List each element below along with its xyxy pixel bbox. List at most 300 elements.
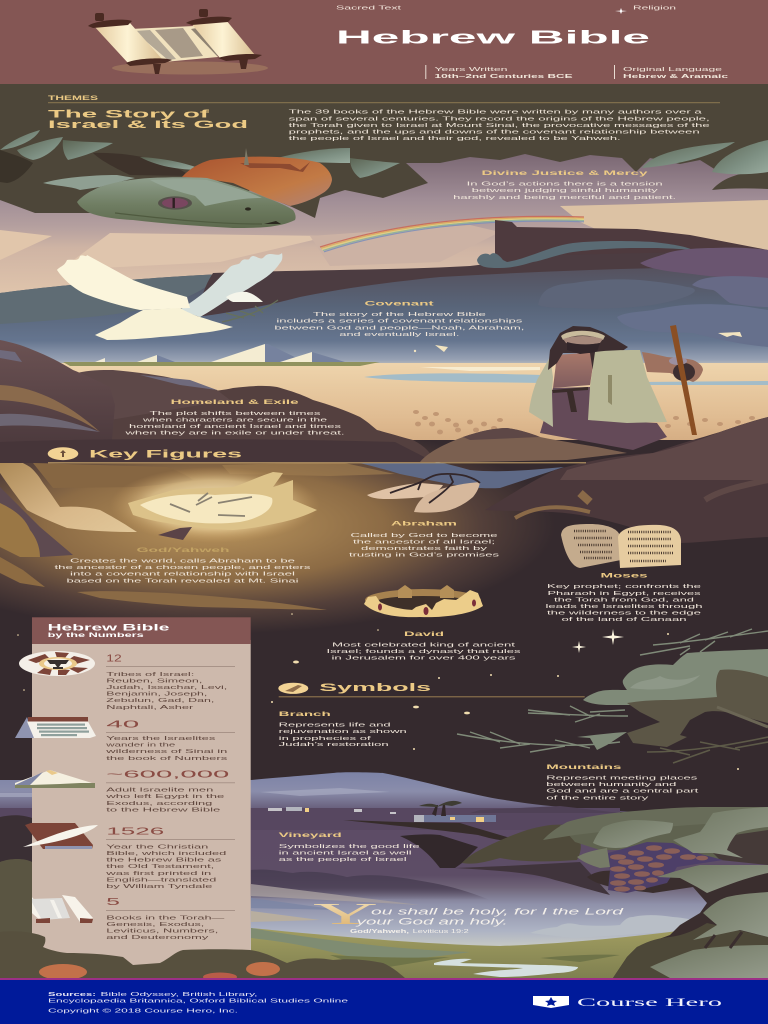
facts: Years Written — [434, 67, 508, 73]
stat: 12 tribes: Benjamin, Joseph, — [106, 692, 208, 698]
bush glow — [110, 467, 320, 543]
dark hollow under bush — [455, 862, 610, 895]
snake nostrils — [245, 207, 281, 224]
heading: Symbols — [278, 682, 585, 697]
category labels: Sacred Text — [336, 6, 402, 12]
quote text: ou shall be holy, for I the Lord — [371, 907, 625, 917]
cloak fold — [608, 375, 612, 405]
text: Mountains — [546, 764, 699, 801]
icon: torah scroll — [88, 9, 268, 74]
text: Mountains: Represent meeting places — [546, 776, 697, 782]
stat: 600,000 — [104, 770, 235, 813]
text: Covenant: between God and people—Noah, Abraham, — [274, 325, 525, 331]
icon: burning bush — [110, 467, 320, 543]
stat: 600,000: Exodus, according — [106, 801, 212, 807]
panel body — [32, 640, 251, 970]
base band of rocks — [0, 439, 436, 463]
text: Covenant — [274, 300, 525, 338]
sky — [0, 140, 768, 300]
icon: mountain — [15, 770, 95, 788]
pale clouds — [530, 915, 700, 938]
first rock hump — [0, 340, 115, 463]
footer — [0, 978, 768, 1024]
text: God/Yahweh — [54, 547, 311, 584]
branch — [717, 707, 768, 727]
sources: Sources: — [48, 992, 96, 998]
water pools — [364, 367, 768, 385]
stat: 12 tribes: Zebulun, Gad, Dan, — [106, 698, 215, 704]
bush trunk — [158, 527, 192, 540]
text: Vineyard: Symbolizes the good life — [279, 844, 421, 850]
stat: 1526: Year the Christian — [106, 844, 208, 850]
text: Abraham: Abraham — [391, 520, 457, 528]
stat: 12 tribes: 12 — [106, 654, 122, 665]
text: Abraham — [349, 520, 499, 559]
tail — [95, 308, 233, 340]
pale leaf on branch — [577, 732, 627, 750]
stat: 40 years: 40 — [106, 719, 141, 730]
cave glow — [0, 440, 768, 640]
heading: Israel & Its God — [48, 119, 248, 131]
yellow-green valley — [251, 928, 700, 978]
intro paragraph: the people of Israel and their god, revealed to be Yahweh. — [289, 136, 621, 142]
logo — [533, 996, 723, 1009]
apple top highlights — [240, 162, 310, 172]
intro paragraph: The 39 books of the Hebrew Bible were written by many authors over a — [289, 110, 703, 116]
text: Homeland & Exile: homeland of ancient Israel and times — [129, 424, 341, 430]
text: Moses: the wilderness to the edge — [547, 610, 703, 616]
crown jewels — [378, 600, 476, 615]
dusk sky — [0, 825, 768, 978]
scroll shadow — [112, 62, 268, 74]
stat: 12 tribes: Judah, Issachar, Levi, — [106, 685, 228, 691]
text: David: David — [404, 631, 444, 638]
text: Vineyard: in ancient Israel as well — [279, 850, 412, 856]
text: Vineyard: Vineyard — [279, 832, 342, 839]
snake head — [77, 177, 296, 228]
stat: 5 books: Genesis, Exodus, — [106, 922, 205, 928]
blue stream — [312, 450, 564, 488]
night ground — [0, 440, 768, 785]
bottom gold streak — [77, 591, 327, 610]
text: Divine Justice & Mercy — [453, 170, 677, 201]
left rock mass — [0, 340, 436, 463]
sky below hill — [0, 250, 768, 366]
stat: 600,000: who left Egypt in the — [104, 794, 226, 800]
heading: The Story of — [48, 108, 210, 120]
vine leaves top band — [543, 807, 768, 840]
intro paragraph: prophets, and the ups and downs of the covenant relationship between — [289, 130, 700, 136]
header band — [0, 0, 768, 84]
right roller — [190, 20, 255, 58]
olive sprig — [222, 300, 278, 322]
category labels — [336, 6, 676, 12]
text: Homeland & Exile — [123, 399, 345, 437]
leaf C — [657, 865, 768, 893]
beard — [567, 342, 600, 354]
rock ledge arcs — [515, 480, 768, 518]
text: Covenant: includes a series of covenant relationships — [276, 319, 522, 325]
header background — [0, 0, 768, 84]
small stars — [17, 613, 739, 770]
vine and grapes — [543, 807, 768, 978]
sources: Encyclopaedia Britannica, Oxford Biblical Studies Online — [48, 999, 348, 1005]
dark coil — [93, 153, 190, 176]
text: Branch: Represents life and — [279, 722, 391, 728]
lower olive bush — [613, 923, 768, 978]
text: Covenant: and eventually Israel. — [339, 332, 460, 338]
text: God/Yahweh: the ancestor of a chosen people, and enters — [54, 565, 311, 571]
icon: sandals — [367, 474, 480, 513]
stat: 1526: the Hebrew Bible as — [106, 858, 221, 864]
stat: 5 books: Leviticus, Numbers, — [106, 929, 219, 935]
text: Mountains: of the entire story — [546, 795, 648, 801]
crown back ring — [365, 589, 481, 611]
sources: Bible Odyssey, British Library, — [100, 992, 258, 998]
palm trees — [419, 801, 462, 816]
snake neck scales — [43, 175, 135, 190]
title: Hebrew Bible — [336, 26, 650, 48]
leaf E — [650, 945, 768, 978]
text: Mountains: between humanity and — [546, 782, 676, 788]
horizon strip — [63, 362, 380, 366]
text: Abraham: Called by God to become — [350, 533, 499, 539]
text: Branch — [279, 711, 407, 748]
bush leaves — [170, 493, 252, 516]
stat: 40 years: Years the Israelites — [106, 736, 215, 742]
heading: Key Figures: Key Figures — [89, 448, 242, 460]
face — [563, 336, 603, 346]
stat: 5 books: 5 — [106, 897, 121, 908]
stat: 600,000: ~600,000 — [106, 770, 231, 781]
headband — [561, 331, 605, 340]
lower right sprig — [647, 737, 768, 763]
text: Vineyard: as the people of Israel — [279, 857, 407, 863]
text: Branch: rejuvenation as shown — [279, 729, 407, 735]
quote attribution — [350, 929, 469, 935]
stat: 1526: the Old Testament, — [106, 864, 215, 870]
dove head — [226, 292, 263, 302]
right wing — [180, 253, 282, 317]
panel title — [48, 623, 169, 639]
text: Branch: Judah’s restoration — [279, 742, 389, 748]
left tablet — [561, 524, 621, 568]
text: Abraham: demonstrates faith by — [361, 546, 487, 552]
text: Branch: in prophecies of — [279, 736, 371, 742]
bottom olive bushes — [0, 931, 405, 978]
figure: Moses — [529, 325, 703, 450]
left gold lump upper — [0, 503, 40, 557]
stat: 5 books: Books in the Torah— — [106, 916, 225, 922]
leaf shadow mass — [587, 870, 768, 978]
dark lower ridge — [400, 834, 478, 868]
heading: Key Figures — [48, 447, 586, 463]
icon: crown — [364, 585, 483, 617]
snake eye — [158, 196, 192, 210]
purple mountain — [0, 772, 640, 812]
heading — [48, 108, 248, 131]
rainbow — [320, 216, 584, 252]
apples — [39, 962, 280, 982]
sources: Copyright © 2018 Course Hero, Inc. — [48, 1007, 239, 1014]
flame — [128, 472, 317, 530]
scroll sheet — [130, 26, 218, 62]
right vine shadow — [700, 830, 768, 865]
text: Abraham: the ancestor of all Israel; — [353, 539, 496, 545]
themes label: THEMES — [48, 96, 98, 102]
facts: Original Language — [623, 67, 723, 73]
left olive mound — [0, 859, 32, 940]
sparkle stars — [572, 629, 624, 653]
text: Moses: Pharaoh in Egypt, receives — [548, 591, 701, 597]
stat: 12 tribes: Reuben, Simeon, — [106, 678, 203, 684]
panel header — [32, 617, 251, 644]
right rock mass — [485, 417, 768, 543]
text: intro — [48, 96, 720, 142]
dark scales at left — [0, 150, 33, 183]
night village landscape — [0, 772, 768, 978]
quote initial: Y — [313, 896, 378, 931]
panel title: by the Numbers — [48, 633, 145, 639]
icon: key figures badge — [48, 447, 78, 460]
sleeve — [673, 363, 695, 381]
scroll text panels — [134, 28, 220, 60]
stat: 1526: Bible, which included — [106, 851, 226, 857]
stat: 5 books — [106, 897, 235, 941]
stat: 1526: English—translated — [106, 877, 216, 883]
foreground rocks at figure base — [420, 417, 768, 480]
panel: by the numbers — [15, 617, 251, 970]
apple — [182, 148, 332, 206]
text: Moses: the Torah from God, and — [554, 597, 694, 603]
upper right tan ground — [222, 462, 395, 476]
right tablet — [618, 525, 681, 568]
stat: 1526: by William Tyndale — [106, 884, 214, 890]
foliage light tufts — [630, 675, 700, 689]
leaf small — [577, 848, 610, 868]
sandy stone hump — [420, 428, 627, 462]
text: God/Yahweh: God/Yahweh — [136, 547, 230, 554]
text: Moses: of the land of Canaan — [562, 617, 686, 623]
darker field bands — [330, 955, 620, 970]
snake scale highlights — [150, 179, 262, 206]
dark stone hump — [463, 428, 540, 440]
village buildings — [268, 807, 496, 822]
text: David: in Jerusalem for over 400 years — [332, 656, 516, 662]
apple stem — [244, 148, 249, 165]
arm — [642, 352, 703, 382]
category labels: Religion — [633, 6, 676, 12]
crown back spikes — [398, 585, 454, 598]
rock facets — [0, 350, 100, 432]
stat: 5 books: and Deuteronomy — [106, 935, 208, 941]
facts: 10th–2nd Centuries BCE — [434, 74, 573, 80]
stat: 1526: 1526 — [106, 827, 166, 838]
flame core — [140, 494, 272, 523]
valley fields — [0, 808, 620, 830]
stat: 1526: was first printed in — [104, 871, 211, 877]
sources — [48, 992, 348, 1014]
text: God/Yahweh: based on the Torah revealed at Mt. Sinai — [66, 578, 298, 584]
olive shadow foliage — [627, 669, 768, 747]
logo: Course Hero — [577, 997, 723, 1009]
stat: 600,000: to the Hebrew Bible — [106, 807, 222, 813]
grape cluster — [608, 842, 723, 893]
tan clouds — [0, 200, 768, 270]
left mountain stripes — [0, 788, 390, 797]
text: David — [326, 631, 521, 662]
grey-green hillside — [251, 928, 470, 963]
illustrated scene background — [0, 140, 768, 473]
icon: tribes wheel — [19, 651, 95, 676]
text: Branch: Branch — [279, 711, 331, 718]
text: God/Yahweh: Creates the world, calls Abraham to be — [70, 558, 297, 564]
text: Moses: Moses — [600, 572, 648, 580]
intro paragraph: the Torah given to Israel at Mount Sinai, the provocative messages of the — [289, 123, 711, 129]
flame shaped light rock — [0, 453, 137, 532]
belt — [552, 387, 588, 412]
text: Mountains: Mountains — [546, 764, 622, 771]
leaf B — [673, 807, 768, 858]
stat: 1526 — [104, 827, 235, 890]
smoke cloud — [477, 241, 693, 268]
purple ridge beyond field — [470, 806, 620, 813]
icon: book and quill — [23, 823, 98, 849]
stat: 40 years: wilderness of Sinai in — [104, 749, 227, 755]
hand — [669, 357, 687, 365]
desert shrubs — [413, 410, 755, 434]
upper vine backing — [560, 815, 768, 862]
third rock hump — [100, 386, 436, 463]
heading: Symbols: Symbols — [319, 682, 431, 694]
quote attribution: God/Yahweh, — [350, 929, 410, 935]
desert floor — [0, 363, 768, 473]
second rock hump — [77, 370, 230, 420]
blue highlight on rock — [140, 375, 217, 390]
pale leaves — [0, 130, 768, 178]
leaf D — [693, 892, 768, 940]
left sole — [367, 483, 443, 499]
snake jaw line — [115, 213, 262, 224]
facts — [425, 65, 729, 80]
stat: 40 years: wander in the — [104, 742, 177, 748]
quote — [313, 896, 625, 935]
intro paragraph: span of several centuries. They record the origins of the Hebrew people, — [289, 116, 711, 122]
storm clouds — [538, 248, 768, 347]
text: Homeland & Exile: The plot shifts between times — [150, 411, 321, 417]
dark purple wedge — [0, 487, 73, 557]
text: Abraham: trusting in God’s promises — [349, 553, 499, 559]
text: Divine Justice & Mercy: between judging sinful humanity — [472, 188, 658, 194]
robe upper — [553, 352, 595, 388]
canopy and serpent — [0, 84, 768, 228]
stat: 40 years — [104, 719, 235, 762]
pyramids — [95, 344, 345, 362]
cloak left — [529, 357, 553, 427]
rocks and key figures background — [0, 417, 768, 785]
stat: 12 tribes: Naphtali, Asher — [106, 705, 193, 711]
left wing — [57, 255, 190, 310]
right foreground rock — [560, 417, 768, 480]
text: Homeland & Exile: when characters are secure in the — [141, 418, 328, 424]
foreground bushes and apples — [0, 859, 405, 982]
hood — [548, 326, 628, 372]
writing rows — [574, 531, 674, 561]
right sole — [414, 482, 480, 513]
dove with olive branch — [57, 253, 282, 340]
text: Covenant: The story of the Hebrew Bible — [313, 312, 487, 318]
river — [434, 959, 578, 977]
icon: symbols badge — [278, 683, 308, 694]
stat: 12 tribes: Tribes of Israel: — [106, 672, 195, 678]
text: Covenant: Covenant — [364, 300, 435, 308]
intro paragraph — [289, 110, 711, 142]
quote text: your God am holy. — [355, 917, 508, 927]
tan ground wedge — [33, 463, 193, 488]
text: Divine Justice & Mercy: Divine Justice & Mercy — [482, 170, 648, 177]
top right olive tree — [457, 629, 768, 763]
robe lower — [540, 387, 667, 450]
text: Homeland & Exile: Homeland & Exile — [171, 399, 299, 406]
quote text — [355, 907, 625, 927]
icon: open scroll — [15, 895, 93, 923]
crown inner — [373, 596, 473, 610]
dark foreground bushes — [251, 869, 490, 900]
text: Moses: leads the Israelites through — [546, 604, 702, 610]
leaf A — [593, 820, 673, 848]
distant birds — [414, 332, 742, 352]
left roller — [93, 23, 162, 63]
text: Divine Justice & Mercy: harshly and being merciful and patient. — [453, 195, 677, 201]
branch marks — [705, 932, 742, 948]
olive canopy — [0, 84, 768, 218]
text: Moses: Key prophet; confronts the — [547, 584, 703, 590]
text: Divine Justice & Mercy: In God’s actions there is a tension — [467, 182, 663, 188]
left gold lump lower — [0, 557, 45, 587]
text: Vineyard — [279, 832, 421, 863]
sandal straps — [390, 474, 480, 503]
facts: Hebrew & Aramaic — [623, 74, 729, 80]
panel title: Hebrew Bible — [48, 623, 169, 633]
sky stripes — [251, 884, 420, 922]
text: Moses — [546, 572, 703, 623]
icon: stone tablets — [561, 524, 681, 568]
cloak right — [588, 350, 667, 423]
text: David: Israel; founds a dynasty that rules — [326, 649, 521, 655]
slate left hillside — [0, 274, 220, 324]
text: Homeland & Exile: when they are in exile or under threat. — [123, 431, 345, 437]
olive mid bush — [462, 825, 581, 864]
distant dark mountain — [495, 220, 768, 300]
pale tree foliage — [583, 649, 768, 705]
footer band — [0, 980, 768, 1024]
stat: 12 tribes — [106, 654, 235, 711]
right dark leaf — [712, 170, 768, 190]
crown front — [364, 590, 483, 617]
text: God/Yahweh: into a covenant relationship with Israel — [70, 572, 295, 578]
dark upper ridge — [343, 820, 517, 841]
icon: calendar — [15, 717, 96, 738]
olive sprigs — [457, 629, 768, 752]
roller handles — [88, 9, 262, 74]
brown hill swoosh — [197, 250, 768, 317]
staff — [670, 325, 697, 435]
stat: 600,000: Adult Israelite men — [106, 788, 213, 794]
dark left ground — [0, 815, 32, 862]
stat: 40 years: the book of Numbers — [106, 756, 227, 762]
quote attribution: Leviticus 19:2 — [413, 929, 469, 935]
icon: star — [615, 8, 627, 14]
